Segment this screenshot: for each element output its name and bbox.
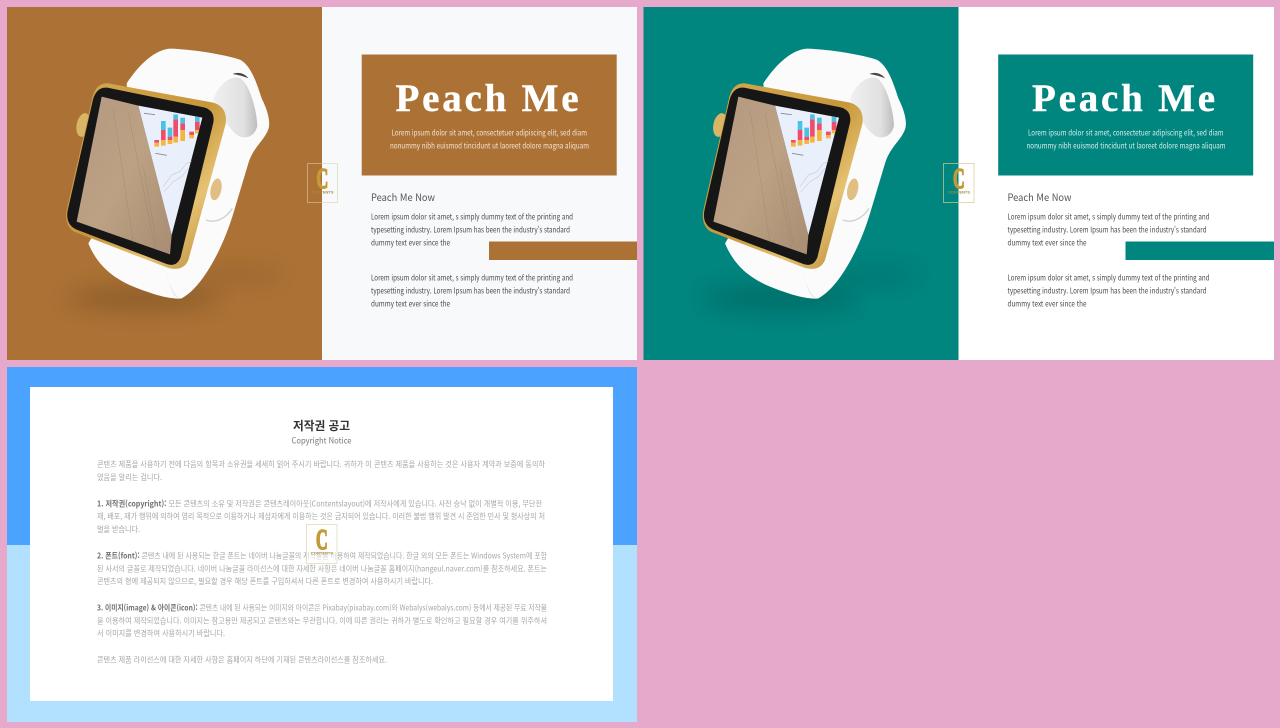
body text 2 <box>1008 272 1210 310</box>
logo watermark <box>308 164 338 202</box>
body text 2: typesetting industry. Lorem Ipsum has been the industry's standard <box>1008 286 1207 296</box>
heading box <box>362 54 617 176</box>
body text 1: typesetting industry. Lorem Ipsum has been the industry's standard <box>1008 224 1207 236</box>
logo watermark: C <box>953 164 965 194</box>
notice body text: 된 사서의 글꼴로 제작되었습니다. 네이버 나눔글꼴 라이선스에 대한 자세한 사항은 네이버 나눔글꼴 홈페이지(hangeul.naver.com)를 참조하세요. 폰트는 <box>97 564 547 574</box>
body text 1: dummy text ever since the <box>1008 238 1086 248</box>
light blue lower band <box>7 545 637 722</box>
notice body text: 재, 배포, 재가 행위에 의하여 영리 목적으로 이용하거나 제삼자에게 이용하는 것은 금지되어 있습니다. 이러한 불법 행위 발견 시 준엄한 민사 및 형사상의 처 <box>97 511 545 522</box>
notice body text: 벌을 받습니다. <box>97 524 140 535</box>
light right field <box>322 7 637 360</box>
body text 2: dummy text ever since the <box>371 298 450 310</box>
logo watermark: C <box>316 164 328 194</box>
heading box: Peach Me <box>1032 77 1215 120</box>
notice body text: 콘텐츠 제품을 사용하기 전에 다음의 항목과 소유권을 세세히 읽어 주시기 바랍니다. 귀하가 이 콘텐츠 제품을 사용하는 것은 사용자 계약과 보증에 동의하 <box>97 459 545 470</box>
heading box <box>998 54 1253 176</box>
logo watermark: C <box>316 525 328 555</box>
logo watermark: CONTENTS <box>312 190 334 194</box>
body text 1: Lorem ipsum dolor sit amet, s simply dummy text of the printing and <box>1008 212 1210 222</box>
subheading: Peach Me Now <box>1008 190 1072 204</box>
logo watermark <box>306 524 337 564</box>
watch illustration <box>702 49 920 311</box>
accent bar <box>489 242 637 260</box>
logo watermark <box>944 164 974 202</box>
panel: copyright notice <box>7 367 637 722</box>
white notice card <box>30 387 613 701</box>
logo watermark: CONTENTS <box>948 190 970 194</box>
brown left field <box>7 7 322 360</box>
subheading: Peach Me Now <box>371 190 435 204</box>
body text 1: dummy text ever since the <box>371 238 450 248</box>
white right field <box>958 7 1274 360</box>
notice title: 저작권 공고 <box>293 417 350 434</box>
notice body text: 을 이용하여 제작되었습니다. 이미지는 참고용만 제공되고 콘텐츠와는 무관합니다. 이에 따른 권리는 귀하가 별도로 확인하고 필요할 경우 여기를 위주하셔 <box>97 616 547 626</box>
body text 2 <box>371 272 573 310</box>
notice body text: 콘텐츠 제품 라이선스에 대한 자세한 사항은 홈페이지 하단에 기재된 콘텐츠라이선스를 참조하세요. <box>97 654 387 666</box>
heading box: Lorem ipsum dolor sit amet, consectetuer adipiscing elit, sed diam <box>392 128 587 138</box>
watch illustration <box>65 49 283 311</box>
logo watermark: CONTENTS <box>311 550 333 556</box>
heading box: Peach Me <box>396 77 578 120</box>
panel: brown slide <box>7 7 637 360</box>
body text 1: Lorem ipsum dolor sit amet, s simply dummy text of the printing and <box>371 212 573 222</box>
notice body text: 3. 이미지(image) & 아이콘(icon): 콘텐츠 내에 된 사용되는 이미지와 아이콘은 Pixabay(pixabay.com)와 Webalys(webalys.com) 등에서 제공된 무료 저작물 <box>97 602 547 614</box>
body text 1 <box>371 212 573 248</box>
body text 2: dummy text ever since the <box>1008 298 1086 310</box>
notice body text <box>97 459 547 666</box>
notice body text: 2. 폰트(font): 콘텐츠 내에 된 사용되는 한글 폰트는 네이버 나눔글꼴의 저작물을 이용하여 제작되었습니다. 한글 외의 모든 폰트는 Windows System에 포함 <box>97 550 547 562</box>
body text 1 <box>1008 212 1210 248</box>
heading box: nonummy nibh euismod tincidunt ut laoreet dolore magna aliquam <box>390 140 589 152</box>
notice body text: 1. 저작권(copyright): 모든 콘텐츠의 소유 및 저작권은 콘텐츠레이아웃(Contentslayout)에 저작사에게 있습니다. 사전 승낙 없이 개별적 이용, 무단전 <box>97 498 542 510</box>
body text 2: typesetting industry. Lorem Ipsum has been the industry's standard <box>371 286 570 296</box>
heading box: Lorem ipsum dolor sit amet, consectetuer adipiscing elit, sed diam <box>1028 128 1224 138</box>
panel: teal slide <box>644 7 1274 360</box>
notice body text: 서 이미지를 변경하여 사용하시기 바랍니다. <box>97 628 225 639</box>
body text 1: typesetting industry. Lorem Ipsum has been the industry's standard <box>371 224 570 236</box>
notice subtitle: Copyright Notice <box>292 434 352 446</box>
notice body text: 콘텐츠의 형에 제공되지 않으므로, 필요할 경우 해당 폰트를 구입하셔서 다른 폰트로 변경하여 사용하시기 바랍니다. <box>97 576 433 587</box>
notice body text: 였음을 알리는 겁니다. <box>97 472 162 483</box>
body text 2: Lorem ipsum dolor sit amet, s simply dummy text of the printing and <box>1008 272 1210 284</box>
blue upper band <box>7 367 637 545</box>
heading box: nonummy nibh euismod tincidunt ut laoreet dolore magna aliquam <box>1026 140 1226 152</box>
accent bar <box>1126 242 1274 260</box>
body text 2: Lorem ipsum dolor sit amet, s simply dummy text of the printing and <box>371 272 573 284</box>
teal left field <box>644 7 958 360</box>
